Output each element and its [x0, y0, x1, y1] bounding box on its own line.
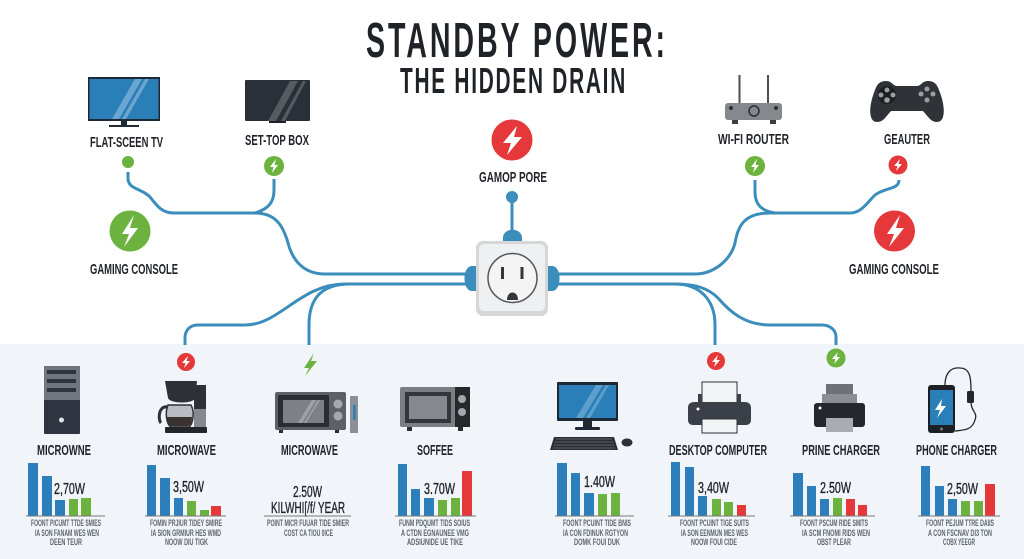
caption: COBX YEEGR: [943, 537, 975, 547]
status icon: Wi-Fi router: [745, 156, 765, 176]
label: Set-top box: SET-TOP BOX: [245, 132, 309, 149]
label: Wi-Fi router: WI-FI ROUTER: [718, 131, 789, 148]
label: MICROWAVE: [157, 442, 216, 459]
caption: FOONT PCUINT TIDE BNIS: [563, 518, 631, 528]
label: PRINE CHARGER: [802, 442, 880, 459]
caption: [563, 518, 631, 547]
column 2: coffee maker: [145, 353, 226, 547]
icon: red bolt right: [874, 210, 915, 252]
bar chart: 3.70W: [424, 481, 456, 498]
caption: [926, 518, 994, 547]
label: Gaming console left: GAMING CONSOLE: [90, 261, 178, 278]
status icon: [177, 353, 195, 371]
caption: DEEN TEUR: [50, 537, 82, 547]
bar chart: 3,40W: [698, 480, 730, 497]
caption: IA SON FANAM WES WEN: [35, 528, 99, 538]
icon: coffee maker: [159, 381, 207, 433]
icon: dark printer: [814, 384, 865, 432]
status icon: [707, 352, 725, 370]
status icon: Geauter: [888, 156, 908, 174]
icon: set-top box: [245, 80, 310, 123]
column 6: printer: [668, 352, 767, 547]
caption: [399, 518, 470, 547]
bottom panel background: [0, 344, 1024, 559]
caption: [800, 518, 870, 547]
title: [366, 14, 668, 101]
column 1: tower: [26, 366, 105, 547]
bar chart: [918, 466, 1000, 516]
caption: DOMK FOUI DUK: [574, 537, 620, 547]
bar chart: [145, 465, 226, 516]
caption: [150, 518, 222, 547]
icon: microwave with side unit: [275, 392, 358, 433]
caption: NOOW FOUI CIDE: [691, 537, 737, 547]
label: Flat-screen TV: FLAT-SCEEN TV: [90, 134, 163, 151]
icon: game controller: [870, 81, 944, 122]
icon: Wi-Fi router: [725, 75, 782, 124]
bar chart: [555, 463, 634, 516]
caption: A CTDN EGNAUNEE VMG: [401, 528, 469, 538]
column 8: phone charger: [916, 368, 1000, 547]
status icon: [826, 348, 846, 368]
bar chart: 3,50W: [173, 479, 205, 496]
label: MICROWNE: [37, 442, 91, 459]
label: Gaming console right: GAMING CONSOLE: [849, 261, 939, 278]
title: STANDBY POWER:: [366, 14, 668, 68]
label: Geauter: GEAUTER: [884, 131, 930, 148]
caption: [267, 518, 349, 538]
status icon: set-top box: [264, 156, 284, 176]
label: DESKTOP COMPUTER: [669, 442, 767, 459]
caption: NOOW DIU TIGK: [165, 537, 208, 547]
icon: desktop computer: [550, 382, 632, 450]
column 4: oven: [395, 387, 476, 547]
bar chart: 2,70W: [54, 481, 86, 498]
caption: FOONT PSCUM RIDE SMITS: [800, 518, 868, 528]
icon: desktop tower: [44, 366, 80, 434]
caption: IA SCM FNOMI RIDS WEN: [802, 528, 870, 538]
icon: phone with cable: [928, 368, 976, 433]
icon: microwave oven: [400, 387, 470, 431]
caption: IA CON FDINUK RGTYON: [563, 528, 628, 538]
title: THE HIDDEN DRAIN: [400, 60, 627, 101]
caption: FUNM PDQUMT TIDS SOIUS: [399, 518, 470, 528]
icon: central wall outlet: [464, 191, 560, 316]
bar chart: 1.40W: [584, 474, 616, 491]
caption: IA SION GRMIUR HES WMD: [151, 528, 221, 538]
icon: green bolt: [110, 210, 150, 252]
label: Gamop Pore: GAMOP PORE: [479, 169, 547, 186]
caption: [31, 518, 101, 547]
icon: printer: [688, 382, 751, 433]
icon: central red bolt: [492, 120, 532, 160]
bar chart: [395, 464, 476, 516]
column 5: computer: [550, 382, 634, 547]
label: MICROWAVE: [281, 442, 338, 459]
caption: IA SON EENMUN MES WES: [681, 528, 748, 538]
caption: OBST PLEAR: [817, 537, 851, 547]
label: SOFFEE: [417, 442, 453, 459]
status dot: TV: [122, 156, 134, 168]
icon: green lightning: [304, 353, 317, 376]
bar chart: [668, 462, 755, 516]
bar chart: 2,50W: [947, 481, 979, 498]
bar chart: [790, 473, 875, 516]
column 7: printer charger: [790, 348, 880, 547]
bar chart: [26, 463, 105, 516]
caption: FOMIN PRJIUR TIDEY SMIRE: [150, 518, 222, 528]
column 3: microwave: [264, 353, 358, 538]
caption: FOONT PCUINT TIGE SUITS: [680, 518, 749, 528]
caption: ADSIUNIDE UE TIKE: [407, 537, 463, 547]
caption: FOONT PICUMT TTDE SMIES: [31, 518, 101, 528]
bar chart: 2.50W: [820, 480, 852, 497]
icon: flat-screen TV: [88, 77, 160, 127]
caption: POINT MICR FUUAR TIDE SMIER: [267, 518, 349, 528]
value readout: KILWHI[/f/ YEAR: [271, 500, 345, 517]
caption: [680, 518, 749, 547]
connection cables: [128, 172, 899, 345]
value readout: [264, 484, 351, 517]
value readout: 2.50W: [293, 484, 323, 501]
caption: COST CA TIOU 0ICE: [284, 528, 333, 538]
